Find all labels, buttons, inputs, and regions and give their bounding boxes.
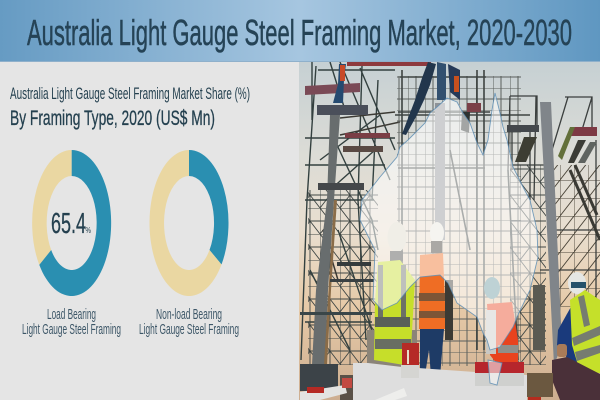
donut value: 65.4 xyxy=(51,208,86,240)
subtitle line: Australia Light Gauge Steel Framing Market Share (%) xyxy=(10,85,250,103)
worker with lime vest, facing away xyxy=(367,222,417,375)
subtitle bold line: By Framing Type, 2020 (US$ Mn) xyxy=(10,106,215,130)
central scaffold tower xyxy=(395,70,530,366)
Australia map overlay xyxy=(360,93,538,385)
seated worker with lime vest xyxy=(552,272,600,400)
photo sky xyxy=(299,62,600,400)
workers on scaffold xyxy=(333,62,470,135)
label: load bearing xyxy=(22,306,121,338)
label: load bearing: Light Gauge Steel Framing xyxy=(22,321,121,338)
header banner xyxy=(0,0,600,62)
chart heading xyxy=(10,85,250,130)
right scaffold towers xyxy=(508,96,600,365)
concrete columns xyxy=(312,102,562,365)
Tasmania overlay xyxy=(488,360,502,385)
left panel background xyxy=(0,62,299,400)
worker with red vest, facing away xyxy=(484,277,518,364)
label: non-load bearing: Light Gauge Steel Framing xyxy=(139,321,239,338)
left scaffold tower xyxy=(301,62,400,365)
scaffold platforms and beams xyxy=(300,62,597,350)
panel: construction photo xyxy=(299,62,600,400)
foreground barriers and debris xyxy=(300,343,553,400)
donut chart: non-load bearing xyxy=(150,150,229,296)
donut chart: load bearing: % xyxy=(86,226,91,235)
worker with orange vest, facing away xyxy=(419,222,453,377)
label: load bearing: Load Bearing xyxy=(47,306,96,323)
donut chart: load bearing xyxy=(32,150,111,296)
label: non-load bearing xyxy=(139,306,239,338)
label: non-load bearing: Non-load Bearing xyxy=(156,306,222,323)
